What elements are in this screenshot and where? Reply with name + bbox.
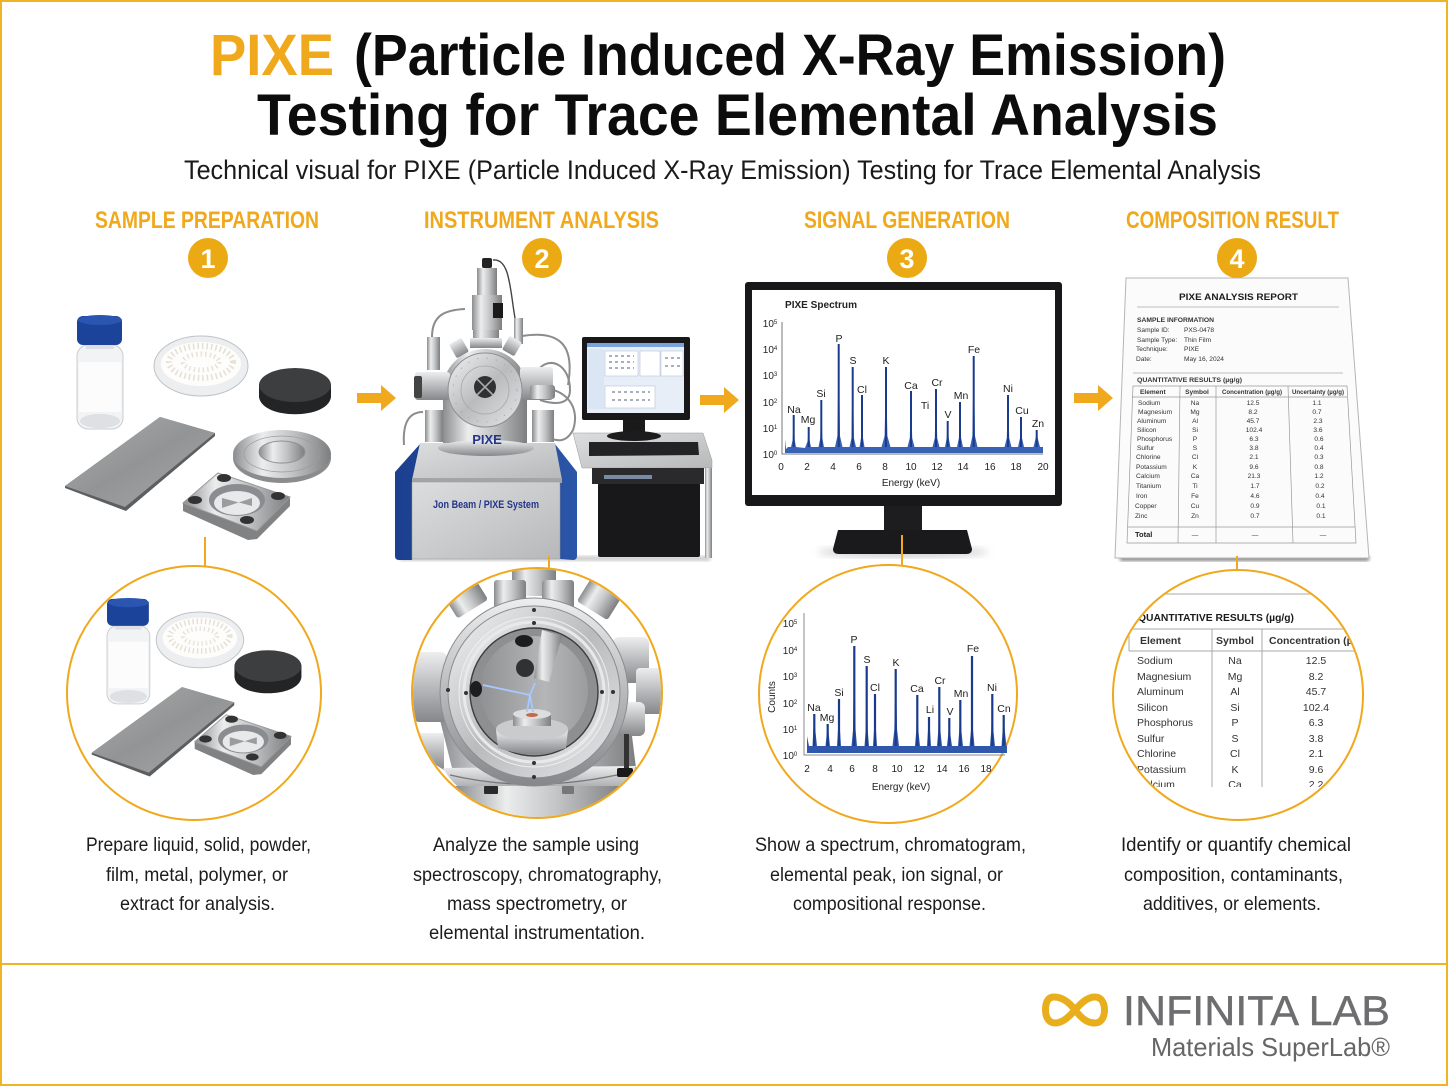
detail circle: results table: 12.5 (1306, 655, 1326, 667)
peak labels: P (835, 333, 843, 345)
step number 4: 4 (1229, 244, 1245, 274)
sample information (1136, 317, 1224, 363)
x axis labels: Energy (keV) (882, 478, 940, 489)
results table: Titanium (1136, 483, 1162, 490)
results table: Cu (1191, 503, 1200, 510)
connector 3 (901, 535, 903, 567)
detail circle: results table (1113, 570, 1372, 820)
x axis labels: 2 (804, 764, 810, 775)
x axis labels: 14 (936, 764, 948, 775)
results table: Aluminum (1137, 418, 1167, 425)
results table: 0.4 (1315, 493, 1325, 500)
y axis labels: 10 (783, 619, 794, 630)
peak labels: Li (926, 704, 934, 716)
arrow 2 (700, 387, 739, 413)
peak labels: Ni (1003, 383, 1013, 395)
results table: Fe (1191, 493, 1199, 500)
peak labels: Fe (967, 643, 979, 655)
results table: 0.8 (1314, 464, 1324, 471)
peak labels: Ni (987, 682, 997, 694)
detail circle: results table: Sulfur (1137, 733, 1165, 745)
results table: 1.2 (1314, 473, 1324, 480)
detail circle: results table: S (1231, 733, 1239, 745)
title: (Particle Induced X-Ray Emission) (354, 23, 1226, 88)
peak labels: S (849, 355, 857, 367)
results table: 1.7 (1250, 483, 1260, 490)
detail circle: results table: Al (1230, 686, 1240, 698)
results table: — (1320, 532, 1327, 539)
description: signal generation: elemental peak, ion signal, or (770, 864, 1003, 886)
results table: 3.6 (1313, 427, 1323, 434)
results table: 0.2 (1315, 483, 1325, 490)
y axis labels: 10 (763, 371, 774, 382)
vertical beam column (427, 258, 523, 370)
detail circle: results table: Ca (1228, 779, 1242, 791)
x axis labels: 2 (804, 462, 810, 473)
results table: 0.1 (1316, 513, 1326, 520)
cabinet top (412, 443, 562, 480)
step heading: composition result: COMPOSITION RESULT (1126, 207, 1339, 234)
results table: Calcium (1136, 473, 1160, 480)
sample information: Thin Film (1184, 337, 1212, 344)
x axis labels: 12 (931, 462, 943, 473)
icon: bottle (77, 315, 123, 429)
detail circle: results table: Calcium (1137, 779, 1175, 791)
y axis labels: Counts (767, 681, 778, 713)
sample information: Date: (1136, 356, 1152, 363)
y axis labels: 2 (774, 399, 778, 405)
description: signal generation (755, 834, 1026, 915)
results heading: QUANTITATIVE RESULTS (µg/g) (1137, 377, 1242, 384)
description: composition result: composition, contaminants, (1124, 864, 1343, 886)
peak labels: Cl (857, 384, 867, 396)
sample information: Sample Type: (1137, 337, 1177, 344)
description: signal generation: Show a spectrum, chromatogram, (755, 834, 1026, 856)
detail circle: results table: Chlorine (1137, 748, 1176, 760)
results table: — (1192, 532, 1199, 539)
description: signal generation: compositional response. (793, 893, 986, 915)
detail circle: results table: Silicon (1137, 702, 1168, 714)
description: instrument analysis: spectroscopy, chromatography, (413, 864, 662, 886)
description: composition result: Identify or quantify chemical (1121, 834, 1351, 856)
peak labels: Ca (910, 683, 924, 695)
detail circle: results table: Sodium (1137, 655, 1173, 667)
results table: Sodium (1138, 400, 1161, 407)
x axis labels: Energy (keV) (872, 782, 930, 793)
results table: 0.4 (1314, 445, 1324, 452)
detail circle: results table: Element (1140, 635, 1181, 647)
peak labels: S (863, 654, 871, 666)
y axis labels: 10 (763, 345, 774, 356)
detail circle: results table: 102.4 (1303, 702, 1329, 714)
monitor screen (752, 290, 1055, 495)
peak labels: Si (816, 388, 826, 400)
step heading: sample preparation: SAMPLE PREPARATION (95, 207, 319, 234)
detail circle: vacuum chamber (412, 566, 664, 820)
step number 2: 2 (534, 244, 550, 274)
description: instrument analysis (413, 834, 662, 944)
results table: 6.3 (1249, 436, 1259, 443)
results table: Si (1192, 427, 1198, 434)
description: sample preparation (86, 834, 311, 915)
y axis labels: 5 (774, 320, 778, 326)
chart heading: PIXE Spectrum (785, 299, 857, 311)
results table: Mg (1190, 409, 1200, 416)
results table: Na (1191, 400, 1200, 407)
detail circle: results table: QUANTITATIVE RESULTS (µg/g) (1138, 612, 1294, 624)
illustration: ion beam PIXE system (395, 258, 712, 561)
vacuum chamber: PIXE (472, 432, 502, 447)
icon: metal plate (65, 417, 215, 511)
sample information: May 16, 2024 (1184, 356, 1224, 363)
peak labels: Ti (921, 400, 929, 412)
detail circle: results table: Cl (1230, 748, 1240, 760)
detail circle: results table: K (1231, 764, 1239, 776)
results table: Copper (1135, 503, 1157, 510)
peak labels: Si (834, 687, 844, 699)
arrow 1 (357, 385, 396, 411)
results table: 8.2 (1248, 409, 1258, 416)
y axis labels: 10 (783, 672, 794, 683)
detail circle: results table: Aluminum (1137, 686, 1184, 698)
x axis labels: 12 (913, 764, 925, 775)
title: PIXE (210, 23, 334, 88)
results table: Element (1140, 389, 1166, 396)
chamber base (418, 720, 636, 820)
step heading: signal generation: SIGNAL GENERATION (804, 207, 1010, 234)
y axis labels: 3 (774, 372, 778, 378)
description: sample preparation: Prepare liquid, solid, powder, (86, 834, 311, 856)
step number 1: 1 (200, 244, 216, 274)
icon: polymer puck (259, 368, 331, 414)
subtitle: Technical visual for PIXE (Particle Induced X-Ray Emission) Testing for Trace Elemental Analysis (184, 155, 1261, 185)
sample information: PIXE (1184, 346, 1200, 353)
icon: powder dish (154, 336, 248, 396)
side ports (413, 637, 664, 736)
results table: Total (1135, 530, 1152, 539)
peak labels: Ca (904, 380, 918, 392)
x axis labels: 0 (778, 462, 784, 473)
results table: 21.3 (1248, 473, 1261, 480)
peak labels: K (882, 355, 890, 367)
detail circle: results table: Mg (1228, 671, 1242, 683)
y axis labels: 1 (794, 726, 798, 732)
x axis labels: 8 (882, 462, 888, 473)
y axis labels: 10 (763, 424, 774, 435)
results table: 0.3 (1314, 454, 1324, 461)
peak labels: Cl (870, 682, 880, 694)
cabinet front with label (412, 482, 560, 559)
peak labels: P (850, 634, 858, 646)
logo: infinita lab: Materials SuperLab® (1151, 1032, 1390, 1062)
detail circle: results table: 8.2 (1309, 671, 1323, 683)
peak labels (787, 333, 1044, 430)
step number 4 (1217, 238, 1257, 278)
detail circle: results table: 2.2 (1309, 779, 1323, 791)
results table: 0.7 (1312, 409, 1322, 416)
description: sample preparation: film, metal, polymer, or (106, 864, 288, 886)
computer monitor (582, 337, 690, 441)
results table: Sulfur (1137, 445, 1155, 452)
x axis labels: 18 (1010, 462, 1022, 473)
chamber body (440, 598, 628, 786)
illustration: PIXE analysis report (1115, 278, 1369, 561)
step number 2 (522, 238, 562, 278)
title (210, 23, 1226, 148)
illustration: sample kit (65, 315, 331, 540)
results table: 12.5 (1247, 400, 1260, 407)
beam nozzle (534, 630, 562, 682)
y axis labels: 10 (783, 725, 794, 736)
results table: 2.3 (1313, 418, 1323, 425)
y axis labels: 4 (774, 346, 778, 352)
results table: Chlorine (1136, 454, 1161, 461)
results table (1127, 386, 1356, 543)
report sheet (1115, 278, 1369, 558)
results table: 3.8 (1249, 445, 1259, 452)
results table: Al (1192, 418, 1198, 425)
detail circle: results table: Symbol (1216, 635, 1254, 647)
x axis labels: 8 (872, 764, 878, 775)
illustration: monitor with PIXE spectrum (745, 282, 1062, 557)
detail circle: results table: Phosphorus (1137, 717, 1193, 729)
x axis labels: 10 (891, 764, 903, 775)
y axis labels: 2 (794, 700, 798, 706)
results table: Zinc (1135, 513, 1148, 520)
keyboard (589, 442, 699, 456)
title: Testing for Trace Elemental Analysis (257, 83, 1218, 148)
x axis labels: 16 (984, 462, 996, 473)
detail circle: spectrum (759, 565, 1017, 823)
y axis labels: 10 (783, 699, 794, 710)
zoomed spectrum chart (767, 613, 1011, 793)
step number 1 (188, 238, 228, 278)
description: instrument analysis: mass spectrometry, or (447, 893, 627, 915)
description: sample preparation: extract for analysis. (120, 893, 275, 915)
y axis labels: 10 (783, 646, 794, 657)
peak labels: V (946, 706, 954, 718)
peak labels: Mn (954, 390, 968, 402)
icon: metal disc (233, 430, 331, 483)
x axis labels (804, 764, 992, 793)
results table: Ti (1192, 483, 1198, 490)
peak labels: Mn (954, 688, 968, 700)
results table: Potassium (1136, 464, 1167, 471)
peak labels: Zn (1032, 418, 1044, 430)
connector 2 (548, 556, 550, 570)
y axis labels: 3 (794, 673, 798, 679)
connector 1 (204, 537, 206, 567)
results table: 0.1 (1316, 503, 1326, 510)
blue cabinet sides (395, 444, 577, 560)
feedthrough (624, 734, 629, 770)
cabinet front with label: Jon Beam / PIXE System (433, 499, 539, 511)
y axis labels: 10 (783, 751, 794, 762)
monitor stand (833, 505, 972, 554)
peak labels: Cn (997, 703, 1011, 715)
sample information: Sample ID: (1137, 327, 1170, 334)
detail circle: results table: Magnesium (1137, 671, 1192, 683)
peak labels (807, 634, 1011, 724)
peak labels: Mg (801, 414, 815, 426)
y axis labels: 10 (763, 319, 774, 330)
detail circle: results table: 6.3 (1309, 717, 1323, 729)
peak labels: Cr (931, 377, 943, 389)
detail circle: results table: 9.6 (1309, 764, 1323, 776)
results table: P (1193, 436, 1198, 443)
description: instrument analysis: elemental instrumentation. (429, 922, 645, 944)
results table: 45.7 (1247, 418, 1260, 425)
x axis labels: 6 (856, 462, 862, 473)
peak labels: V (944, 409, 952, 421)
results table: 0.9 (1250, 503, 1260, 510)
cables (404, 260, 575, 445)
peak labels: K (892, 657, 900, 669)
results table: Ca (1191, 473, 1200, 480)
detail circle: results table: Na (1228, 655, 1242, 667)
detail circle: results table: P (1231, 717, 1239, 729)
x axis labels: 14 (957, 462, 969, 473)
x axis labels: 6 (849, 764, 855, 775)
results table: 1.1 (1312, 400, 1322, 407)
peak labels: Na (807, 702, 821, 714)
description: instrument analysis: Analyze the sample using (433, 834, 639, 856)
x axis labels: 18 (980, 764, 992, 775)
results table: S (1193, 445, 1198, 452)
detail circle: results table: Concentration (µg/g) (1269, 635, 1372, 647)
monitor frame (745, 282, 1062, 506)
detail circle: results table: Si (1230, 702, 1240, 714)
report title: PIXE ANALYSIS REPORT (1179, 292, 1298, 303)
peak labels: Na (787, 404, 801, 416)
vacuum chamber (414, 336, 555, 456)
computer table (573, 433, 712, 558)
logo: infinita lab (1046, 987, 1390, 1062)
y axis labels: 5 (794, 620, 798, 626)
results table: Silicon (1137, 427, 1157, 434)
results table: 4.6 (1250, 493, 1260, 500)
results table: Symbol (1185, 389, 1209, 396)
results table: K (1193, 464, 1198, 471)
stage (496, 709, 568, 754)
step heading: instrument analysis: INSTRUMENT ANALYSIS (424, 207, 659, 234)
results table: Zn (1191, 513, 1199, 520)
x axis labels: 16 (958, 764, 970, 775)
beam rays (483, 683, 535, 712)
results table: Uncertainty (µg/g) (1292, 389, 1344, 396)
detail circle: results table: 45.7 (1306, 686, 1326, 698)
peak labels: Fe (968, 344, 980, 356)
detail circle: results table: Potassium (1137, 764, 1186, 776)
y axis labels: 0 (774, 451, 778, 457)
logo: infinita lab: INFINITA LAB (1123, 987, 1390, 1034)
step number 3: 3 (899, 244, 915, 274)
results table: 0.6 (1314, 436, 1324, 443)
x axis labels: 4 (830, 462, 836, 473)
connector 4 (1236, 556, 1238, 570)
sample information: Technique: (1136, 346, 1168, 353)
spectrum chart (763, 319, 1049, 489)
icon: infinity mark (1046, 997, 1104, 1023)
y axis labels: 10 (763, 398, 774, 409)
x axis labels: 10 (905, 462, 917, 473)
icon: sample holder (183, 473, 290, 540)
results table: 0.7 (1250, 513, 1260, 520)
arrow 3 (1074, 385, 1113, 411)
results table: Cl (1192, 454, 1199, 461)
results table: 2.1 (1249, 454, 1259, 461)
description: composition result (1121, 834, 1351, 915)
y axis labels: 1 (774, 425, 778, 431)
peak labels: Cu (1015, 405, 1029, 417)
results table: Iron (1136, 493, 1148, 500)
chamber window (470, 628, 598, 756)
x axis labels: 20 (1037, 462, 1049, 473)
peak labels: Mg (820, 712, 834, 724)
y axis labels (767, 619, 798, 762)
sample information: PXS-0478 (1184, 327, 1214, 334)
results table: Magnesium (1138, 409, 1173, 416)
sample information: SAMPLE INFORMATION (1137, 317, 1214, 324)
results table: 9.6 (1249, 464, 1259, 471)
y axis labels: 10 (763, 450, 774, 461)
detail circle: sample kit (67, 566, 321, 820)
detail circle: results table: 3.8 (1309, 733, 1323, 745)
results table: Concentration (µg/g) (1222, 389, 1282, 396)
peak labels: Cr (934, 675, 946, 687)
results table: 102.4 (1246, 427, 1263, 434)
detail circle: results table: 2.1 (1309, 748, 1323, 760)
ring bolts (446, 608, 615, 779)
results table: — (1252, 532, 1259, 539)
y axis labels: 4 (794, 647, 798, 653)
results table: Phosphorus (1137, 436, 1173, 443)
x axis labels: 4 (827, 764, 833, 775)
step number 3 (887, 238, 927, 278)
y axis labels (763, 319, 778, 461)
top ports (450, 569, 620, 620)
description: composition result: additives, or elements. (1143, 893, 1321, 915)
x axis labels (778, 462, 1049, 489)
y axis labels: 0 (794, 752, 798, 758)
